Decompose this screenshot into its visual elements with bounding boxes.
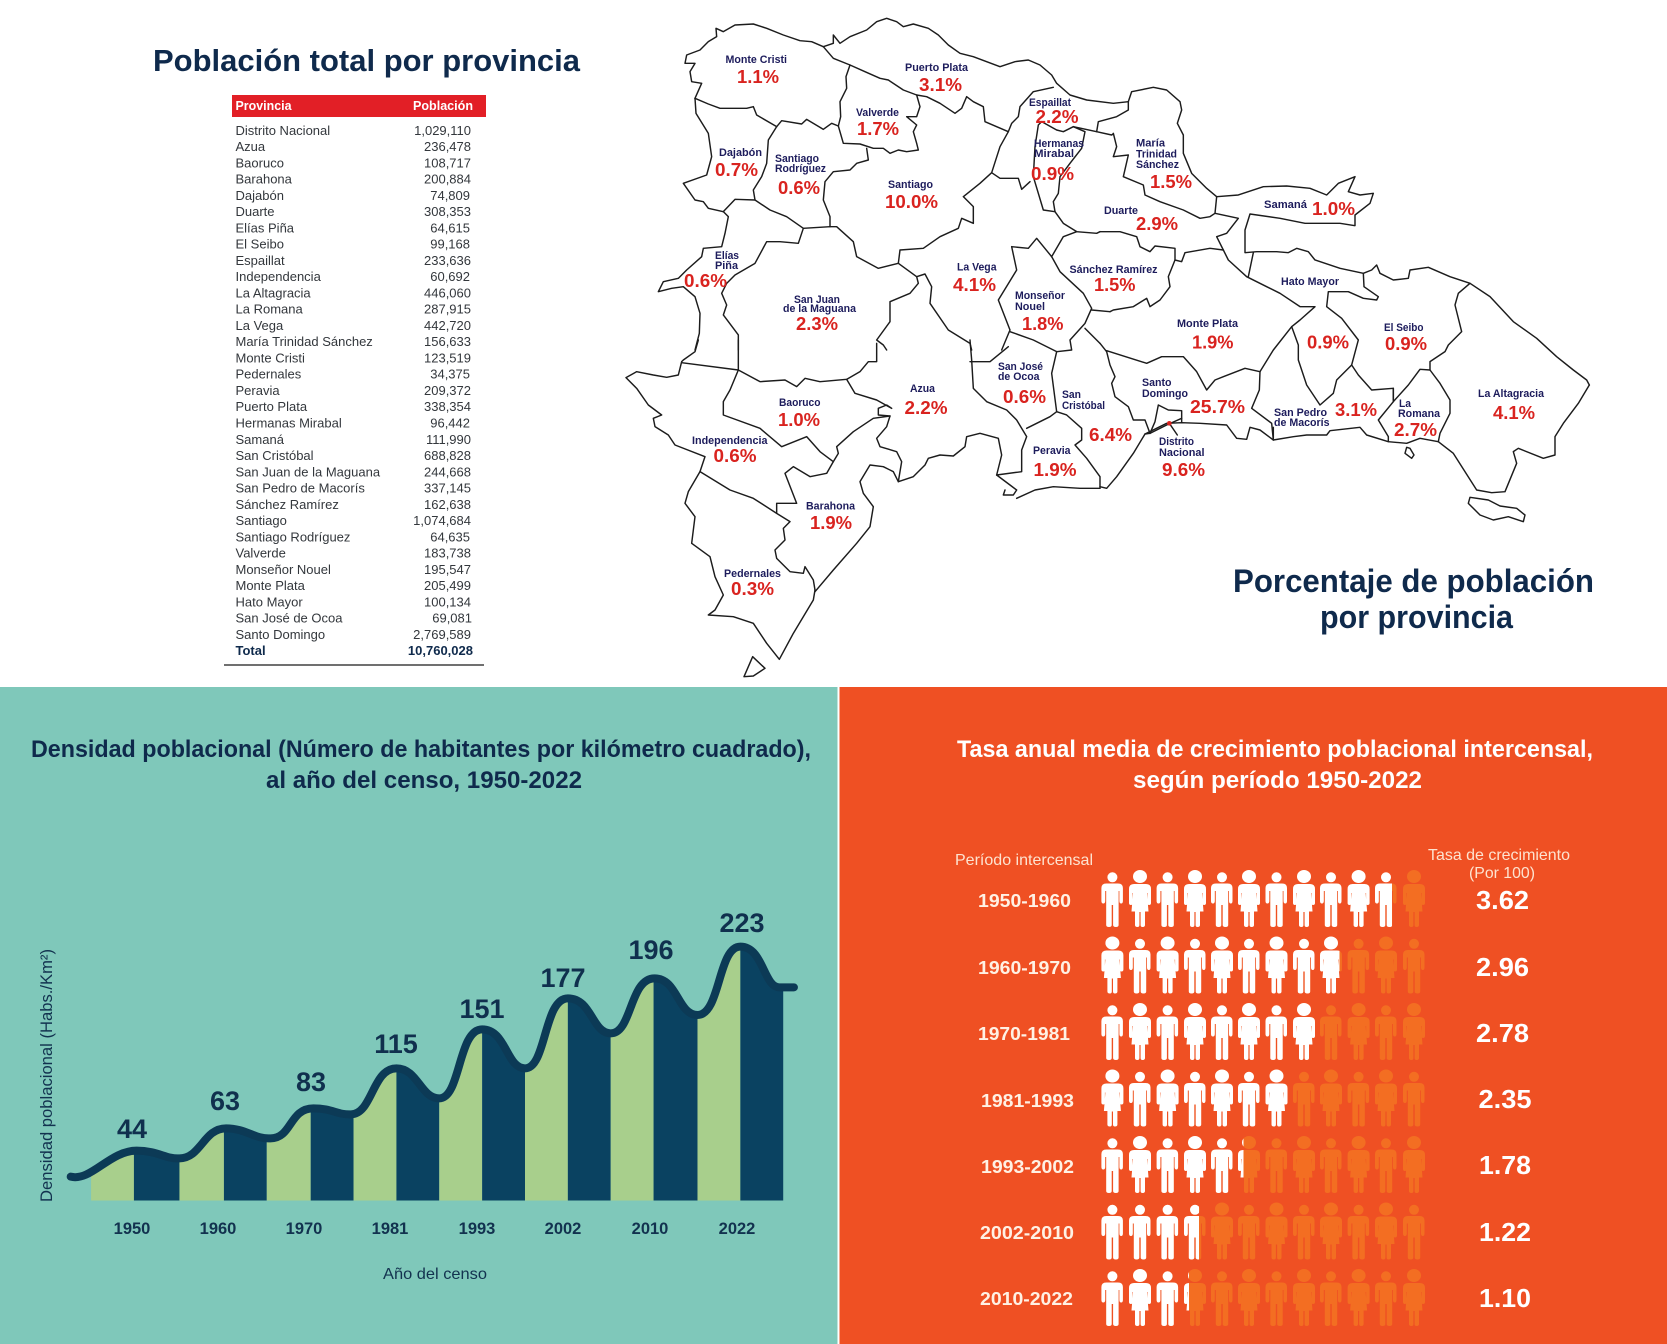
column heading: tasa: Tasa de crecimiento — [1428, 847, 1570, 864]
total row: 10,760,028 — [408, 643, 473, 658]
table rows: Santiago Rodríguez — [236, 529, 350, 544]
table rows: Hato Mayor — [236, 594, 303, 609]
province labels: 0.9% — [1307, 332, 1349, 352]
province labels: La Altagracia — [1478, 388, 1545, 400]
province labels: Dajabón — [719, 147, 762, 159]
row 1970-1981: 2.78 — [1476, 1018, 1529, 1048]
title: población total por provincia: Población total por provincia — [153, 43, 581, 78]
province labels: Mirabal — [1034, 148, 1074, 160]
province labels: El Seibo — [1384, 322, 1424, 334]
table header: Provincia — [236, 99, 293, 113]
province labels: de la Maguana — [783, 303, 857, 315]
data values: 151 — [459, 994, 505, 1024]
province labels: 0.6% — [684, 270, 727, 291]
row 2010-2022: 1.10 — [1479, 1283, 1531, 1313]
data values: 63 — [210, 1086, 240, 1116]
map borders: southeast — [1100, 352, 1589, 522]
row 2010-2022: 2010-2022 — [980, 1288, 1073, 1309]
province labels: San Pedro — [1274, 407, 1327, 419]
table rows: 96,442 — [430, 416, 470, 430]
area chart — [71, 930, 794, 1201]
row 1993-2002 — [981, 1136, 1531, 1193]
table rows: Puerto Plata — [236, 399, 308, 414]
table rows: Valverde — [236, 546, 286, 561]
table rows: Santiago — [236, 513, 287, 528]
census years — [114, 1220, 755, 1238]
province labels: 3.1% — [1335, 399, 1377, 420]
table rows: Baoruco — [236, 155, 284, 170]
province labels: 0.9% — [1031, 163, 1074, 184]
province labels: Monseñor — [1015, 290, 1066, 302]
province labels: 0.9% — [1385, 333, 1427, 354]
total row — [224, 643, 484, 666]
province labels: Espaillat — [1029, 97, 1071, 109]
province labels: 25.7% — [1190, 396, 1245, 417]
heading: tasa — [957, 736, 1593, 794]
province labels: Baoruco — [779, 397, 821, 409]
province labels: Samaná — [1264, 199, 1308, 211]
row 1981-1993: 1981-1993 — [981, 1090, 1074, 1111]
column heading: tasa: (Por 100) — [1469, 865, 1535, 882]
province labels: 2.9% — [1136, 213, 1178, 234]
table rows: 1,029,110 — [414, 123, 471, 138]
province labels: Monte Plata — [1177, 318, 1239, 330]
data values: 44 — [117, 1114, 147, 1144]
table rows: 162,638 — [424, 497, 471, 512]
row 1960-1970: 2.96 — [1476, 952, 1529, 982]
row 1981-1993 — [981, 1070, 1532, 1126]
table rows: Monseñor Nouel — [236, 562, 331, 577]
map borders: northeast — [1100, 87, 1589, 405]
heading: porcentaje de población por provincia: por provincia — [1320, 599, 1513, 635]
map borders: southwest — [626, 340, 1107, 677]
table rows: 209,372 — [424, 383, 471, 398]
census years: 2002 — [545, 1220, 581, 1238]
province labels: 2.3% — [796, 313, 838, 334]
table rows: Monte Plata — [236, 578, 306, 593]
data values: 177 — [540, 963, 586, 993]
heading: tasa: según período 1950-2022 — [1133, 767, 1422, 794]
row 1950-1960: 3.62 — [1476, 885, 1529, 915]
data values: 223 — [719, 908, 765, 938]
table rows: Santo Domingo — [236, 627, 325, 642]
province labels: 0.7% — [715, 159, 758, 180]
table rows: 287,915 — [424, 302, 471, 317]
province labels: Duarte — [1104, 205, 1138, 217]
province labels: 3.1% — [919, 74, 962, 95]
table rows: Independencia — [236, 269, 322, 284]
heading: porcentaje de población por provincia — [1233, 563, 1594, 635]
province labels: 1.8% — [1022, 313, 1064, 334]
data values: 83 — [296, 1067, 326, 1097]
table rows: 34,375 — [430, 367, 470, 382]
province labels: 1.0% — [1312, 198, 1355, 219]
heading: porcentaje de población por provincia: Porcentaje de población — [1233, 563, 1594, 599]
province labels: Cristóbal — [1062, 400, 1105, 412]
province labels: Nouel — [1015, 301, 1045, 313]
row 2002-2010: 2002-2010 — [980, 1222, 1074, 1243]
table rows: 183,738 — [424, 546, 471, 561]
table rows: Peravia — [236, 383, 280, 398]
table rows: 69,081 — [432, 611, 472, 626]
column heading: período: Período intercensal — [955, 852, 1093, 869]
table rows: 64,615 — [430, 220, 470, 235]
province labels: 0.6% — [1003, 386, 1046, 407]
table rows: 74,809 — [430, 188, 470, 203]
province labels: 0.3% — [731, 578, 774, 599]
province labels: María — [1136, 138, 1166, 150]
table rows: 233,636 — [424, 253, 471, 268]
table rows: San Pedro de Macorís — [236, 480, 365, 496]
province labels: Puerto Plata — [905, 62, 969, 74]
province labels: 2.2% — [1036, 106, 1078, 127]
province labels: 1.9% — [1034, 459, 1076, 480]
heading: densidad: Densidad poblacional (Número de habitantes por kilómetro cuadrado), — [31, 736, 811, 763]
province labels: Hermanas — [1034, 138, 1084, 150]
province labels: de Macorís — [1274, 417, 1330, 429]
province labels: Elías — [715, 250, 739, 262]
table rows: 200,884 — [424, 172, 471, 187]
table rows: Elías Piña — [236, 220, 295, 235]
province labels: 2.7% — [1394, 419, 1437, 440]
table rows: Dajabón — [236, 188, 284, 203]
table rows: Hermanas Mirabal — [236, 416, 342, 430]
table rows: El Seibo — [236, 237, 284, 252]
table rows: La Altagracia — [236, 285, 311, 300]
table rows: 338,354 — [424, 399, 471, 414]
province labels: 0.6% — [714, 445, 756, 466]
province labels: Hato Mayor — [1281, 276, 1340, 288]
table header — [232, 95, 486, 117]
table rows: 60,692 — [430, 269, 470, 284]
census years: 1981 — [372, 1220, 408, 1238]
row 1993-2002: 1993-2002 — [981, 1156, 1074, 1177]
table rows: 688,828 — [424, 448, 471, 463]
heading: tasa: Tasa anual media de crecimiento poblacional intercensal, — [957, 736, 1593, 763]
province labels: Sánchez Ramírez — [1070, 264, 1158, 276]
province labels: San — [1062, 389, 1081, 401]
province labels: Nacional — [1159, 447, 1204, 459]
table rows: Sánchez Ramírez — [236, 497, 339, 512]
province labels: La Vega — [957, 262, 997, 274]
table rows: Duarte — [236, 204, 275, 219]
province labels: Santiago — [888, 179, 933, 191]
row 1993-2002: 1.78 — [1479, 1150, 1531, 1180]
province labels: Pedernales — [724, 568, 781, 580]
table rows: 2,769,589 — [413, 627, 471, 642]
table rows: 244,668 — [424, 464, 471, 479]
province labels: La — [1399, 398, 1412, 410]
x axis label: Año del censo — [383, 1266, 487, 1283]
province labels: Domingo — [1142, 388, 1188, 400]
province labels: 1.5% — [1150, 171, 1192, 192]
province labels: Valverde — [856, 107, 899, 119]
province labels: 1.0% — [778, 409, 820, 430]
province labels: 0.6% — [778, 177, 820, 198]
census years: 1970 — [286, 1220, 322, 1238]
province labels: Sánchez — [1136, 159, 1179, 171]
province labels: Santo — [1142, 377, 1172, 389]
province labels: 1.9% — [810, 512, 852, 533]
table rows: Samaná — [236, 432, 285, 447]
table rows: 156,633 — [424, 334, 471, 349]
table rows: Azua — [236, 139, 266, 154]
province labels: Distrito — [1159, 436, 1194, 448]
y axis label: Densidad poblacional (Habs./Km²) — [38, 949, 56, 1202]
data values — [117, 908, 765, 1144]
total row: Total — [236, 643, 266, 658]
table rows: 308,353 — [424, 204, 471, 219]
province labels: Piña — [715, 260, 739, 272]
census years: 1950 — [114, 1220, 150, 1238]
table rows: La Romana — [236, 302, 303, 317]
table rows: 64,635 — [430, 529, 470, 544]
province labels: Romana — [1398, 408, 1441, 420]
province labels: 1.7% — [857, 118, 899, 139]
data values: 115 — [374, 1029, 418, 1059]
province labels: Rodríguez — [775, 163, 826, 175]
province labels: 4.1% — [953, 274, 996, 295]
table: población por provincia — [224, 95, 486, 666]
table rows: 1,074,684 — [413, 513, 471, 528]
table rows: 236,478 — [424, 139, 471, 154]
province labels: 6.4% — [1089, 424, 1132, 445]
table rows: 123,519 — [424, 350, 471, 365]
table rows: La Vega — [236, 318, 284, 333]
province labels: 2.2% — [904, 397, 948, 418]
table rows: 108,717 — [424, 155, 471, 170]
province labels: Trinidad — [1136, 148, 1177, 160]
province labels: San José — [998, 361, 1043, 373]
census years: 2010 — [632, 1220, 668, 1238]
row 2010-2022 — [980, 1269, 1531, 1326]
province labels: 1.5% — [1094, 274, 1136, 295]
map borders: northwest — [658, 18, 1128, 352]
province labels: 4.1% — [1493, 402, 1535, 423]
table rows: Distrito Nacional — [236, 123, 330, 138]
table rows: 195,547 — [424, 562, 471, 577]
row 1970-1981: 1970-1981 — [978, 1023, 1070, 1044]
panel: tasa de crecimiento — [840, 687, 1667, 1344]
table rows: Monte Cristi — [236, 350, 305, 365]
map: provincias de República Dominicana — [626, 18, 1589, 677]
table rows: San Juan de la Maguana — [236, 464, 381, 479]
table rows: María Trinidad Sánchez — [236, 334, 373, 349]
table rows: 205,499 — [424, 578, 471, 593]
province labels: 10.0% — [885, 191, 938, 212]
province labels: de Ocoa — [998, 371, 1040, 383]
row 1981-1993: 2.35 — [1478, 1084, 1532, 1114]
province labels: Monte Cristi — [726, 54, 787, 66]
table rows: 111,990 — [426, 432, 471, 447]
table rows: 99,168 — [430, 237, 470, 252]
province labels: 1.1% — [737, 66, 779, 87]
table rows: 100,134 — [424, 594, 471, 609]
panel: densidad poblacional — [0, 687, 838, 1344]
province labels: Santiago — [775, 153, 819, 165]
table rows: 337,145 — [424, 480, 471, 496]
table rows: Espaillat — [236, 253, 285, 268]
row 2002-2010: 1.22 — [1479, 1217, 1531, 1247]
row 2002-2010 — [980, 1202, 1531, 1260]
province labels: 1.9% — [1192, 332, 1234, 352]
table rows: Barahona — [236, 172, 293, 187]
column heading: tasa — [1428, 847, 1570, 882]
province labels: 9.6% — [1162, 459, 1205, 480]
table rows: San José de Ocoa — [236, 611, 343, 626]
province labels: San Juan — [794, 294, 840, 306]
table header: Población — [413, 99, 473, 113]
row 1970-1981 — [978, 1003, 1529, 1060]
data values: 196 — [628, 935, 674, 965]
row 1950-1960: 1950-1960 — [978, 890, 1071, 911]
province labels: Independencia — [692, 435, 768, 447]
table rows: 446,060 — [424, 285, 471, 300]
province labels: Peravia — [1033, 445, 1071, 457]
province labels — [684, 54, 1545, 599]
province labels: Barahona — [806, 500, 856, 512]
table rows — [236, 123, 472, 642]
table rows: 442,720 — [424, 318, 471, 333]
table rows: San Cristóbal — [236, 448, 314, 463]
province labels: Azua — [910, 383, 936, 395]
row 1960-1970 — [978, 936, 1529, 994]
census years: 2022 — [719, 1220, 755, 1238]
table rows: Pedernales — [236, 367, 302, 382]
census years: 1993 — [459, 1220, 495, 1238]
row 1950-1960 — [978, 870, 1529, 927]
heading: densidad: al año del censo, 1950-2022 — [266, 767, 582, 794]
census years: 1960 — [200, 1220, 236, 1238]
row 1960-1970: 1960-1970 — [978, 957, 1071, 978]
heading: densidad — [31, 736, 811, 794]
